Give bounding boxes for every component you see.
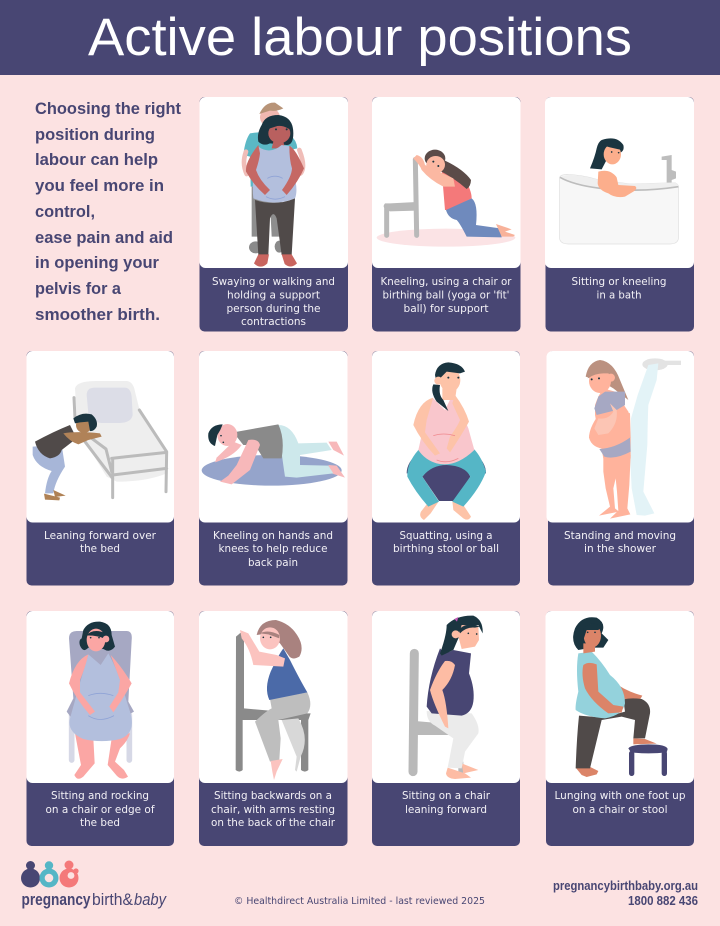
panel: sitting and rocking [26,611,174,846]
intro text: in opening your [35,253,160,272]
panel: shower [546,351,694,586]
panel: leaning over bed [26,351,174,586]
caption [380,276,512,315]
illustration: woman lunging with foot on stool [573,617,668,777]
intro text [35,99,181,324]
caption: back pain [248,557,298,569]
caption: on a chair or edge of [46,804,155,816]
caption: contractions [241,316,306,328]
caption: holding a support [227,290,320,302]
logo: pregnancy birth and baby [21,860,167,909]
illustration: woman held by support person [243,103,304,267]
contact details: 1800 882 436 [628,894,698,908]
illustration: woman on birthing ball [407,362,486,520]
panel: sitting on chair leaning forward [372,611,520,846]
panel: kneeling with chair [372,97,520,332]
intro text: labour can help [35,150,158,169]
caption: birthing ball (yoga or 'fit' [382,290,510,302]
illustration: woman sitting on chair [67,622,134,779]
caption: Sitting or kneeling [572,276,666,288]
illustration: woman on hands and knees on mat [202,424,345,486]
illustration: woman in bath [559,138,679,244]
caption: Lunging with one foot up [554,790,686,802]
caption: in the shower [584,543,657,555]
caption: leaning forward [405,804,487,816]
caption: Sitting and rocking [51,790,149,802]
caption: person during the [226,303,320,315]
caption [212,276,335,328]
intro text: smoother birth. [35,305,160,324]
intro text: ease pain and aid [35,228,173,247]
caption [213,530,333,569]
caption: on the back of the chair [211,817,336,829]
header band with title: Active labour positions [88,8,632,67]
caption [393,530,499,555]
contact details [553,879,698,908]
copyright line: © Healthdirect Australia Limited - last reviewed 2025 [234,896,485,907]
intro text: Choosing the right [35,99,181,118]
caption [44,530,157,555]
caption [564,530,676,555]
illustration: woman sitting leaning forward [413,616,483,779]
caption: Sitting backwards on a [214,790,332,802]
illustration: woman leaning over bed [33,381,167,500]
caption: Swaying or walking and [212,276,335,288]
caption: birthing stool or ball [393,543,499,555]
panel: lunging [546,611,694,846]
caption: Leaning forward over [44,530,157,542]
intro text: pelvis for a [35,279,122,298]
caption [402,790,491,816]
panel: bath [545,97,694,332]
contact details: pregnancybirthbaby.org.au [553,879,698,893]
caption: on a chair or stool [572,804,668,816]
caption: knees to help reduce [218,543,328,555]
caption [554,790,686,816]
header band with title [0,0,720,75]
caption: Kneeling, using a chair or [380,276,512,288]
caption [211,790,336,829]
caption [46,790,155,829]
caption: ball) for support [404,303,488,315]
intro text: position during [35,125,155,144]
caption [572,276,666,302]
panel: swaying or walking [200,97,348,332]
caption: Squatting, using a [400,530,492,542]
logo: pregnancy birth and baby: baby [134,890,167,909]
panel: squatting with ball [372,351,520,586]
illustration: woman sitting backwards on chair [236,620,311,780]
logo: pregnancy birth and baby: pregnancy [22,890,91,909]
panel: sitting backwards [199,611,348,846]
caption: Kneeling on hands and [213,530,333,542]
caption: chair, with arms resting [211,804,335,816]
caption: the bed [80,817,120,829]
intro text: you feel more in [35,176,164,195]
caption: Sitting on a chair [402,790,491,802]
intro text: control, [35,202,95,221]
logo: pregnancy birth and baby: birth& [92,890,134,909]
illustration: woman kneeling at chair [377,150,515,247]
caption: the bed [80,543,120,555]
caption: in a bath [596,290,642,302]
panel: hands and knees [199,351,348,586]
illustration: woman in shower [586,358,681,519]
caption: Standing and moving [564,530,676,542]
